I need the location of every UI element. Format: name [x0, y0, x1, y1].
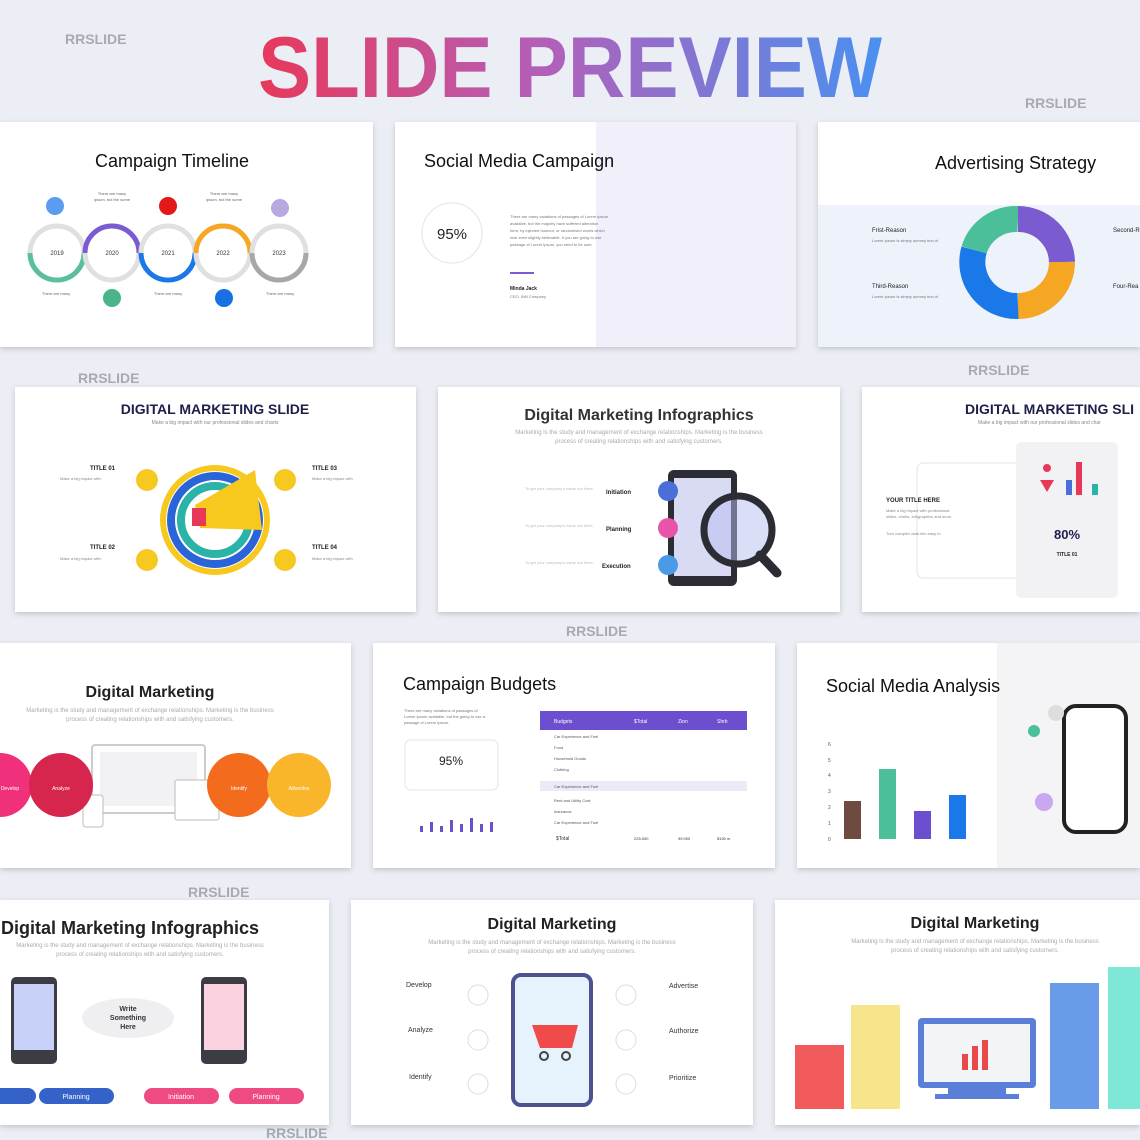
panel: social media campaign: Minda Jack — [510, 286, 537, 292]
panel: digital marketing slide 80%: 80% — [1054, 527, 1080, 542]
panel: digital marketing slide 80%: DIGITAL MARKETING SLI — [965, 401, 1134, 417]
panel: campaign timeline: There are many — [210, 191, 238, 196]
panel: social media analysis: Social Media Analysis — [826, 676, 1000, 696]
panel: digital marketing slide: Make a big impact with — [60, 556, 101, 561]
panel: digital marketing devices: process of creating relationships with and satisfying customers. — [66, 717, 234, 723]
panel: campaign budgets: There are many variations of passages of — [404, 708, 478, 713]
panel: digital marketing slide: Make a big impact with — [60, 476, 101, 481]
panel: digital marketing devices — [0, 643, 351, 868]
watermark labels: RRSLIDE — [566, 623, 627, 639]
panel: social media campaign — [395, 122, 796, 347]
panel: campaign budgets: Budgets — [554, 719, 573, 725]
panel: digital marketing infographics phones: Write — [119, 1006, 137, 1013]
panel: digital marketing infographics magnifier: Initiation — [606, 490, 631, 496]
panel: digital marketing bars: process of creating relationships with and satisfying customers. — [891, 948, 1059, 954]
panel: campaign timeline: 2022 — [216, 251, 230, 257]
panel: digital marketing phone cart: Identify — [409, 1074, 432, 1081]
panel: digital marketing infographics magnifier: Digital Marketing Infographics — [524, 407, 754, 424]
panel: digital marketing phone cart: Digital Marketing — [488, 916, 616, 933]
panel: campaign budgets: Car Experience and Fuel — [554, 820, 598, 825]
panel: digital marketing slide 80%: Make a big impact with professional — [886, 508, 949, 513]
panel: social media analysis: 1 — [828, 821, 831, 827]
panel: social media analysis — [797, 643, 1140, 868]
panel: campaign budgets: Zion — [678, 719, 688, 725]
panel: campaign budgets: $Total — [634, 719, 647, 725]
panel: advertising strategy: Lorem Ipsum is simply dummy text of — [872, 294, 939, 299]
panel: digital marketing devices: Develop — [1, 786, 19, 792]
panel: digital marketing slide 80%: slides, charts, infographics and more. — [886, 514, 952, 519]
panel: advertising strategy: Frist-Reason — [872, 228, 906, 234]
panel: digital marketing slide: TITLE 02 — [90, 545, 116, 551]
panel: digital marketing devices: Advertise — [289, 786, 310, 792]
panel: digital marketing devices: Digital Marketing — [86, 684, 214, 701]
panel: campaign budgets: Rent and Utility Cost — [554, 798, 591, 803]
panel: digital marketing infographics phones: Planning — [252, 1094, 280, 1101]
panel: campaign budgets: $150 m — [717, 836, 731, 841]
panel: digital marketing infographics magnifier: To get your company's name out there, — [525, 523, 594, 528]
panel: digital marketing bars: Digital Marketing — [911, 915, 1039, 932]
panel: social media analysis: 0 — [828, 837, 831, 843]
panel: advertising strategy — [818, 122, 1140, 347]
panel: campaign timeline: There are many — [42, 291, 70, 296]
panel: social media analysis: 2 — [828, 805, 831, 811]
panel: campaign timeline: There are many — [154, 291, 182, 296]
panel: digital marketing infographics magnifier: To get your company's name out there, — [525, 486, 594, 491]
panel: advertising strategy: Advertising Strategy — [935, 153, 1096, 173]
watermark labels: RRSLIDE — [65, 31, 126, 47]
panel: campaign budgets: Campaign Budgets — [403, 674, 556, 694]
panel: digital marketing infographics phones: Marketing is the study and management of exchange relationships. Marketing is the business — [16, 943, 264, 949]
panel: digital marketing slide: TITLE 01 — [90, 466, 116, 472]
panel: digital marketing infographics phones — [0, 900, 329, 1125]
panel: digital marketing infographics magnifier: Planning — [606, 527, 632, 533]
panel: campaign timeline: 2021 — [161, 251, 175, 257]
panel: digital marketing infographics magnifier: Marketing is the study and management of exchange relationships. Marketing is the business — [515, 430, 763, 436]
panel: digital marketing slide: Make a big impact with our professional slides and charts — [152, 420, 279, 426]
panel: campaign timeline: ipsum, but the some — [94, 197, 131, 202]
panel: digital marketing infographics magnifier — [438, 387, 840, 612]
panel: campaign budgets — [373, 643, 775, 868]
panel: campaign budgets: Insurance — [554, 809, 572, 814]
panel: campaign budgets: 95% — [439, 754, 463, 768]
panel: digital marketing infographics phones: Digital Marketing Infographics — [1, 918, 259, 938]
panel: digital marketing infographics magnifier: To get your company's name out there, — [525, 560, 594, 565]
panel: campaign timeline: There are many — [266, 291, 294, 296]
panel: digital marketing slide 80%: Turn complex data into easy to — [886, 531, 941, 536]
panel: campaign timeline: Campaign Timeline — [95, 151, 249, 171]
panel: campaign budgets: Food — [554, 745, 563, 750]
panel: social media campaign: look even slightly believable. If you are going to use — [510, 235, 602, 240]
watermark labels: RRSLIDE — [78, 370, 139, 386]
panel: social media analysis: 5 — [828, 758, 831, 764]
panel: campaign budgets: passage of Lorem Ipsum. — [404, 720, 449, 725]
panel: campaign budgets: 99.000 — [678, 836, 691, 841]
panel: digital marketing slide 80%: TITLE 01 — [1057, 552, 1078, 558]
panel: social media campaign: form, by injected humour, or randomised words which — [510, 228, 605, 233]
panel: digital marketing phone cart: Marketing is the study and management of exchange relationships. Marketing is the business — [428, 940, 676, 946]
title: SLIDE PREVIEW — [258, 20, 883, 116]
watermark labels: RRSLIDE — [188, 884, 249, 900]
panel: social media campaign: Social Media Campaign — [424, 151, 614, 171]
panel: digital marketing infographics phones: Planning — [62, 1094, 90, 1101]
panel: advertising strategy: Lorem Ipsum is simply dummy text of — [872, 238, 939, 243]
panel: digital marketing infographics magnifier: Execution — [602, 564, 631, 570]
panel: social media analysis: 6 — [828, 742, 831, 748]
panel: digital marketing bars — [775, 900, 1140, 1125]
panel: digital marketing phone cart: Develop — [406, 982, 432, 989]
panel: campaign budgets: Clothing — [554, 767, 569, 772]
panel: social media campaign: 95% — [437, 226, 467, 243]
panel: campaign budgets: 225.000 — [634, 836, 649, 841]
panel: social media campaign: There are many variations of passages of Lorem Ipsum — [510, 214, 609, 219]
panel: digital marketing infographics magnifier: process of creating relationships with and satisfying customers. — [555, 439, 723, 445]
panel: digital marketing phone cart: Advertise — [669, 983, 698, 990]
panel: digital marketing devices: Identify — [231, 786, 248, 792]
panel: digital marketing phone cart: Authorize — [669, 1028, 699, 1035]
panel: campaign budgets: Household Goods — [554, 756, 586, 761]
panel: social media analysis: 3 — [828, 789, 831, 795]
panel: digital marketing phone cart: Analyze — [408, 1027, 433, 1034]
panel: campaign timeline — [0, 122, 373, 347]
panel: campaign timeline: 2023 — [272, 251, 286, 257]
panel: digital marketing slide: DIGITAL MARKETING SLIDE — [121, 401, 309, 417]
panel: advertising strategy: Second-R — [1113, 228, 1140, 234]
panel: campaign budgets: Car Experience and Fuel — [554, 734, 598, 739]
panel: social media campaign: available, but the majority have suffered alteration — [510, 221, 598, 226]
panel: digital marketing phone cart: process of creating relationships with and satisfying customers. — [468, 949, 636, 955]
panel: social media analysis: 4 — [828, 773, 831, 779]
panel: campaign budgets: Shrb — [717, 719, 728, 725]
panel: campaign budgets: Car Experience and Fuel — [554, 784, 598, 789]
panel: digital marketing infographics phones: process of creating relationships with and satisfying customers. — [56, 952, 224, 958]
panel: campaign timeline: 2019 — [50, 251, 64, 257]
panel: digital marketing bars: Marketing is the study and management of exchange relationships. Marketing is the business — [851, 939, 1099, 945]
panel: digital marketing slide 80% — [862, 387, 1140, 612]
panel: digital marketing slide: TITLE 03 — [312, 466, 338, 472]
panel: digital marketing infographics phones: Here — [120, 1024, 136, 1031]
panel: digital marketing slide 80%: YOUR TITLE HERE — [886, 498, 940, 504]
panel: campaign budgets: $Total — [556, 836, 569, 842]
panel: digital marketing phone cart — [351, 900, 753, 1125]
watermark labels: RRSLIDE — [1025, 95, 1086, 111]
panel: campaign budgets: Lorem Ipsum available, but the going to use a — [404, 714, 486, 719]
panel: digital marketing slide — [15, 387, 416, 612]
panel: digital marketing slide 80%: Make a big impact with our professional slides and char — [978, 420, 1101, 426]
panel: social media campaign: CEO, INN Company — [510, 294, 546, 299]
panel: digital marketing slide: Make a big impact with — [312, 556, 353, 561]
watermark labels: RRSLIDE — [968, 362, 1029, 378]
panel: advertising strategy: Third-Reason — [872, 284, 908, 290]
panel: social media campaign: passage of Lorem Ipsum, you need to be sure — [510, 242, 592, 247]
panel: digital marketing infographics phones: Initiation — [168, 1094, 194, 1101]
panel: campaign timeline: 2020 — [105, 251, 119, 257]
panel: advertising strategy: Four-Rea — [1113, 284, 1139, 290]
panel: digital marketing infographics phones: Something — [110, 1015, 146, 1022]
panel: digital marketing slide: Make a big impact with — [312, 476, 353, 481]
panel: digital marketing devices: Marketing is the study and management of exchange relationships. Marketing is the business — [26, 708, 274, 714]
panel: digital marketing phone cart: Prioritize — [669, 1075, 696, 1082]
panel: campaign timeline: ipsum, but the some — [206, 197, 243, 202]
panel: digital marketing devices: Analyze — [52, 786, 70, 792]
panel: campaign timeline: There are many — [98, 191, 126, 196]
panel: digital marketing slide: TITLE 04 — [312, 545, 338, 551]
